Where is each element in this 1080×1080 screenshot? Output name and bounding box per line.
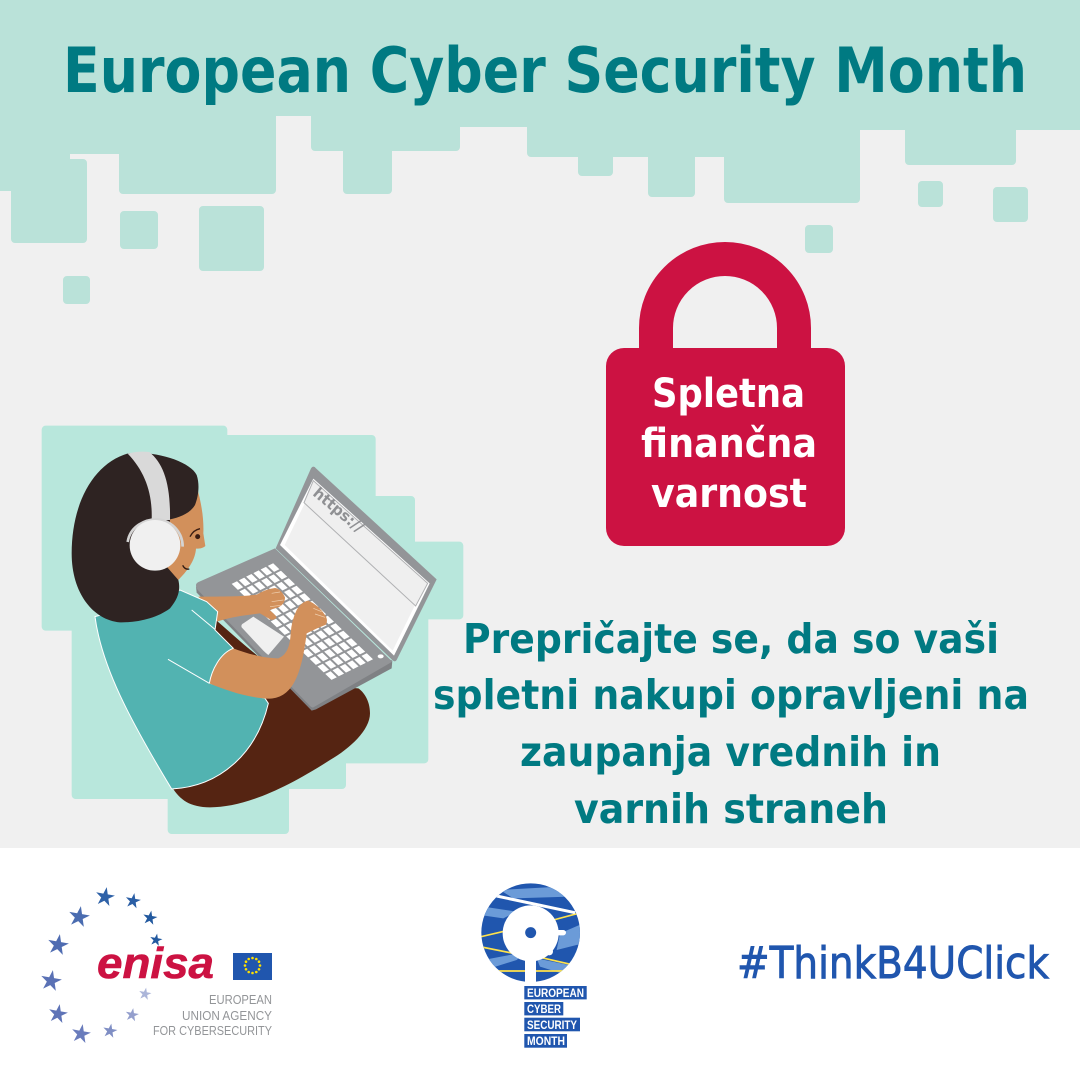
padlock body [606,348,845,546]
star ring [39,886,163,1044]
padlock label: finančna [641,421,817,467]
laptop base [196,548,392,707]
eyebrow [190,529,200,537]
keyhole globe [478,883,583,983]
ear cup [130,520,180,571]
logo label boxes [524,986,587,1048]
power button [378,654,384,658]
agency name: FOR CYBERSECURITY [153,1023,272,1038]
shirt fold lines [168,610,215,683]
logo label text: CYBER [527,1004,562,1016]
logo label text: EUROPEAN [527,988,584,1000]
header skyline band [0,0,1080,300]
address bar text: https:// [309,484,368,537]
laptop screen frame [276,467,437,661]
headphones [128,452,183,571]
padlock shackle [656,259,794,352]
agency name [153,992,272,1038]
padlock label: Spletna [652,371,805,417]
logo label text: SECURITY [527,1020,577,1032]
ENISA logo [39,886,272,1044]
ear cup rim [128,519,183,547]
address bar [304,481,428,606]
main message: Prepričajte se, da so vaši [463,615,999,663]
European Cyber Security Month logo [478,883,587,1048]
hair [72,453,198,622]
laptop [196,467,437,711]
front arm and hand [209,601,327,699]
laptop screen [280,479,430,656]
illustration: woman with laptop [46,430,459,830]
padlock label: varnost [651,471,807,517]
touchpad [241,617,284,655]
background [0,0,1080,848]
logo label text: MONTH [527,1036,565,1048]
back arm and hand [198,588,285,621]
trousers [172,620,370,807]
headband [128,452,170,520]
keyboard [232,563,373,680]
agency name: EUROPEAN [209,992,272,1007]
main message: zaupanja vrednih in [520,728,941,776]
finger lines [270,592,325,617]
main message: varnih straneh [574,785,888,833]
enisa wordmark: enisa [97,939,214,988]
EU flag [233,953,272,980]
shirt [95,590,268,789]
face [163,487,205,580]
padlock badge [606,259,845,546]
footer band [0,848,1080,1080]
hashtag: #ThinkB4UClick [737,938,1049,989]
brown leg gap [214,621,260,659]
smile [183,565,189,569]
laptop base edge [196,587,392,711]
main message: spletni nakupi opravljeni na [433,671,1029,719]
main message [433,615,1029,833]
eye [195,534,200,539]
padlock label [641,371,817,517]
agency name: UNION AGENCY [182,1008,272,1023]
mint backdrop [46,430,459,830]
logo label text [527,988,584,1048]
